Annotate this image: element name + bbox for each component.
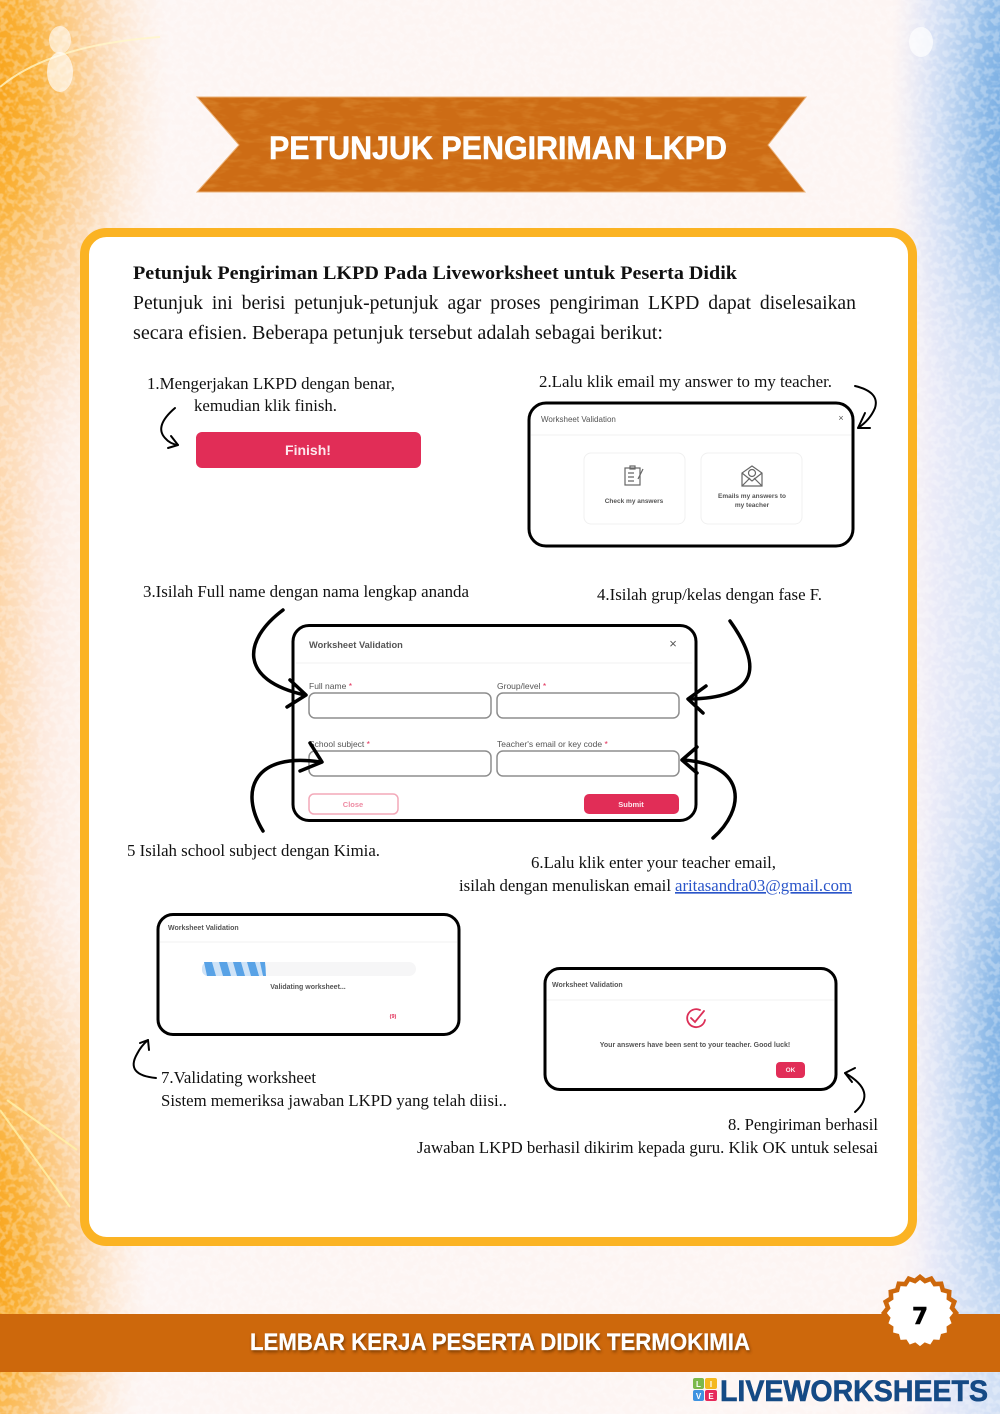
icon: live squares: V xyxy=(696,1392,702,1401)
close button xyxy=(309,794,398,814)
step 7 text xyxy=(161,1068,507,1110)
step 4 text: 4.Isilah grup/kelas dengan fase F. xyxy=(597,585,822,604)
modal: choose answer action: Worksheet Validation xyxy=(541,415,616,424)
modal: validating xyxy=(158,914,459,1034)
arrow: school subject xyxy=(252,743,322,831)
arrow: step 7 xyxy=(134,1040,156,1078)
card: check my answers xyxy=(584,453,685,524)
step 6 text: 6.Lalu klik enter your teacher email, xyxy=(531,853,776,872)
submit button: Submit xyxy=(618,800,644,809)
ok button xyxy=(776,1062,805,1078)
step 8 text: Jawaban LKPD berhasil dikirim kepada guru. Klik OK untuk selesai xyxy=(417,1138,878,1157)
finish button xyxy=(196,432,421,468)
card: email answers to teacher: my teacher xyxy=(735,502,770,509)
step 7 text: 7.Validating worksheet xyxy=(161,1068,316,1087)
modal: validating: Validating worksheet... xyxy=(270,984,346,991)
modal: success xyxy=(545,968,836,1090)
card: email answers to teacher xyxy=(701,453,802,524)
intro text block xyxy=(133,263,856,344)
liveworksheets logo: LIVEWORKSHEETS xyxy=(720,1375,988,1408)
modal: success: Your answers have been sent to your teacher. Good luck! xyxy=(600,1042,790,1049)
card: check my answers: Check my answers xyxy=(605,498,664,505)
intro text block: Petunjuk Pengiriman LKPD Pada Liveworksheet untuk Peserta Didik xyxy=(133,263,737,284)
field: full name xyxy=(309,681,491,718)
modal: form: × xyxy=(669,636,677,651)
field: group/level xyxy=(497,681,679,718)
step 7 text: Sistem memeriksa jawaban LKPD yang telah diisi.. xyxy=(161,1091,507,1110)
title ribbon xyxy=(197,97,806,192)
step 3 text: 3.Isilah Full name dengan nama lengkap ananda xyxy=(143,582,470,601)
close button: Close xyxy=(343,800,363,809)
progress bar xyxy=(202,962,416,976)
field: school subject xyxy=(309,739,491,776)
arrow: full name xyxy=(254,610,306,707)
step 1 text xyxy=(147,374,395,415)
arrow: group level xyxy=(688,621,750,713)
main panel xyxy=(84,232,912,1242)
title: PETUNJUK PENGIRIMAN LKPD xyxy=(269,130,727,166)
icon: live squares: I xyxy=(710,1380,712,1389)
modal: validating: (9) xyxy=(390,1014,397,1020)
step 2 text: 2.Lalu klik email my answer to my teacher. xyxy=(539,372,832,391)
intro text block: Petunjuk ini berisi petunjuk-petunjuk agar proses pengiriman LKPD dapat diselesaikan xyxy=(133,293,856,314)
arrow: step 1 xyxy=(161,408,178,448)
icon: check xyxy=(687,1009,705,1027)
step 6 text xyxy=(459,853,852,895)
page number badge xyxy=(881,1274,959,1352)
card: email answers to teacher: Emails my answers to xyxy=(718,493,786,500)
icon: live squares: L xyxy=(696,1380,701,1389)
step 5 text: 5 Isilah school subject dengan Kimia. xyxy=(127,841,380,860)
footer band xyxy=(0,1314,1000,1372)
step 1 text: 1.Mengerjakan LKPD dengan benar, xyxy=(147,374,395,393)
modal: choose answer action xyxy=(529,403,853,546)
submit button xyxy=(584,794,679,814)
step 1 text: kemudian klik finish. xyxy=(194,396,337,415)
step 6 text: aritasandra03@gmail.com xyxy=(675,876,852,895)
arrow: teacher email xyxy=(682,747,735,838)
field: group/level: Group/level * xyxy=(497,681,547,691)
modal: form: Worksheet Validation xyxy=(309,640,403,650)
field: teacher email: Teacher's email or key code * xyxy=(497,739,608,749)
field: teacher email xyxy=(497,739,679,776)
ok button: OK xyxy=(786,1067,796,1074)
finish button: Finish! xyxy=(285,442,331,458)
field: full name: Full name * xyxy=(309,681,353,691)
field: school subject: School subject * xyxy=(309,739,371,749)
step 6 text: isilah dengan menuliskan email xyxy=(459,876,671,895)
arrow: step 2 xyxy=(855,386,876,428)
intro text block: secara efisien. Beberapa petunjuk tersebut adalah sebagai berikut: xyxy=(133,323,663,344)
page number badge: 7 xyxy=(912,1304,928,1330)
modal: success: Worksheet Validation xyxy=(552,982,623,989)
step 8 text xyxy=(417,1115,878,1157)
footer text: LEMBAR KERJA PESERTA DIDIK TERMOKIMIA xyxy=(251,1331,751,1358)
step 8 text: 8. Pengiriman berhasil xyxy=(728,1115,878,1134)
modal: choose answer action: × xyxy=(838,413,844,423)
footer text: LEMBAR KERJA PESERTA DIDIK TERMOKIMIA xyxy=(250,1329,750,1356)
arrow: step 8 xyxy=(845,1068,864,1112)
icon: live squares xyxy=(693,1378,717,1401)
modal: validating: Worksheet Validation xyxy=(168,925,239,932)
icon: live squares: E xyxy=(708,1392,714,1401)
modal: form xyxy=(293,626,696,820)
